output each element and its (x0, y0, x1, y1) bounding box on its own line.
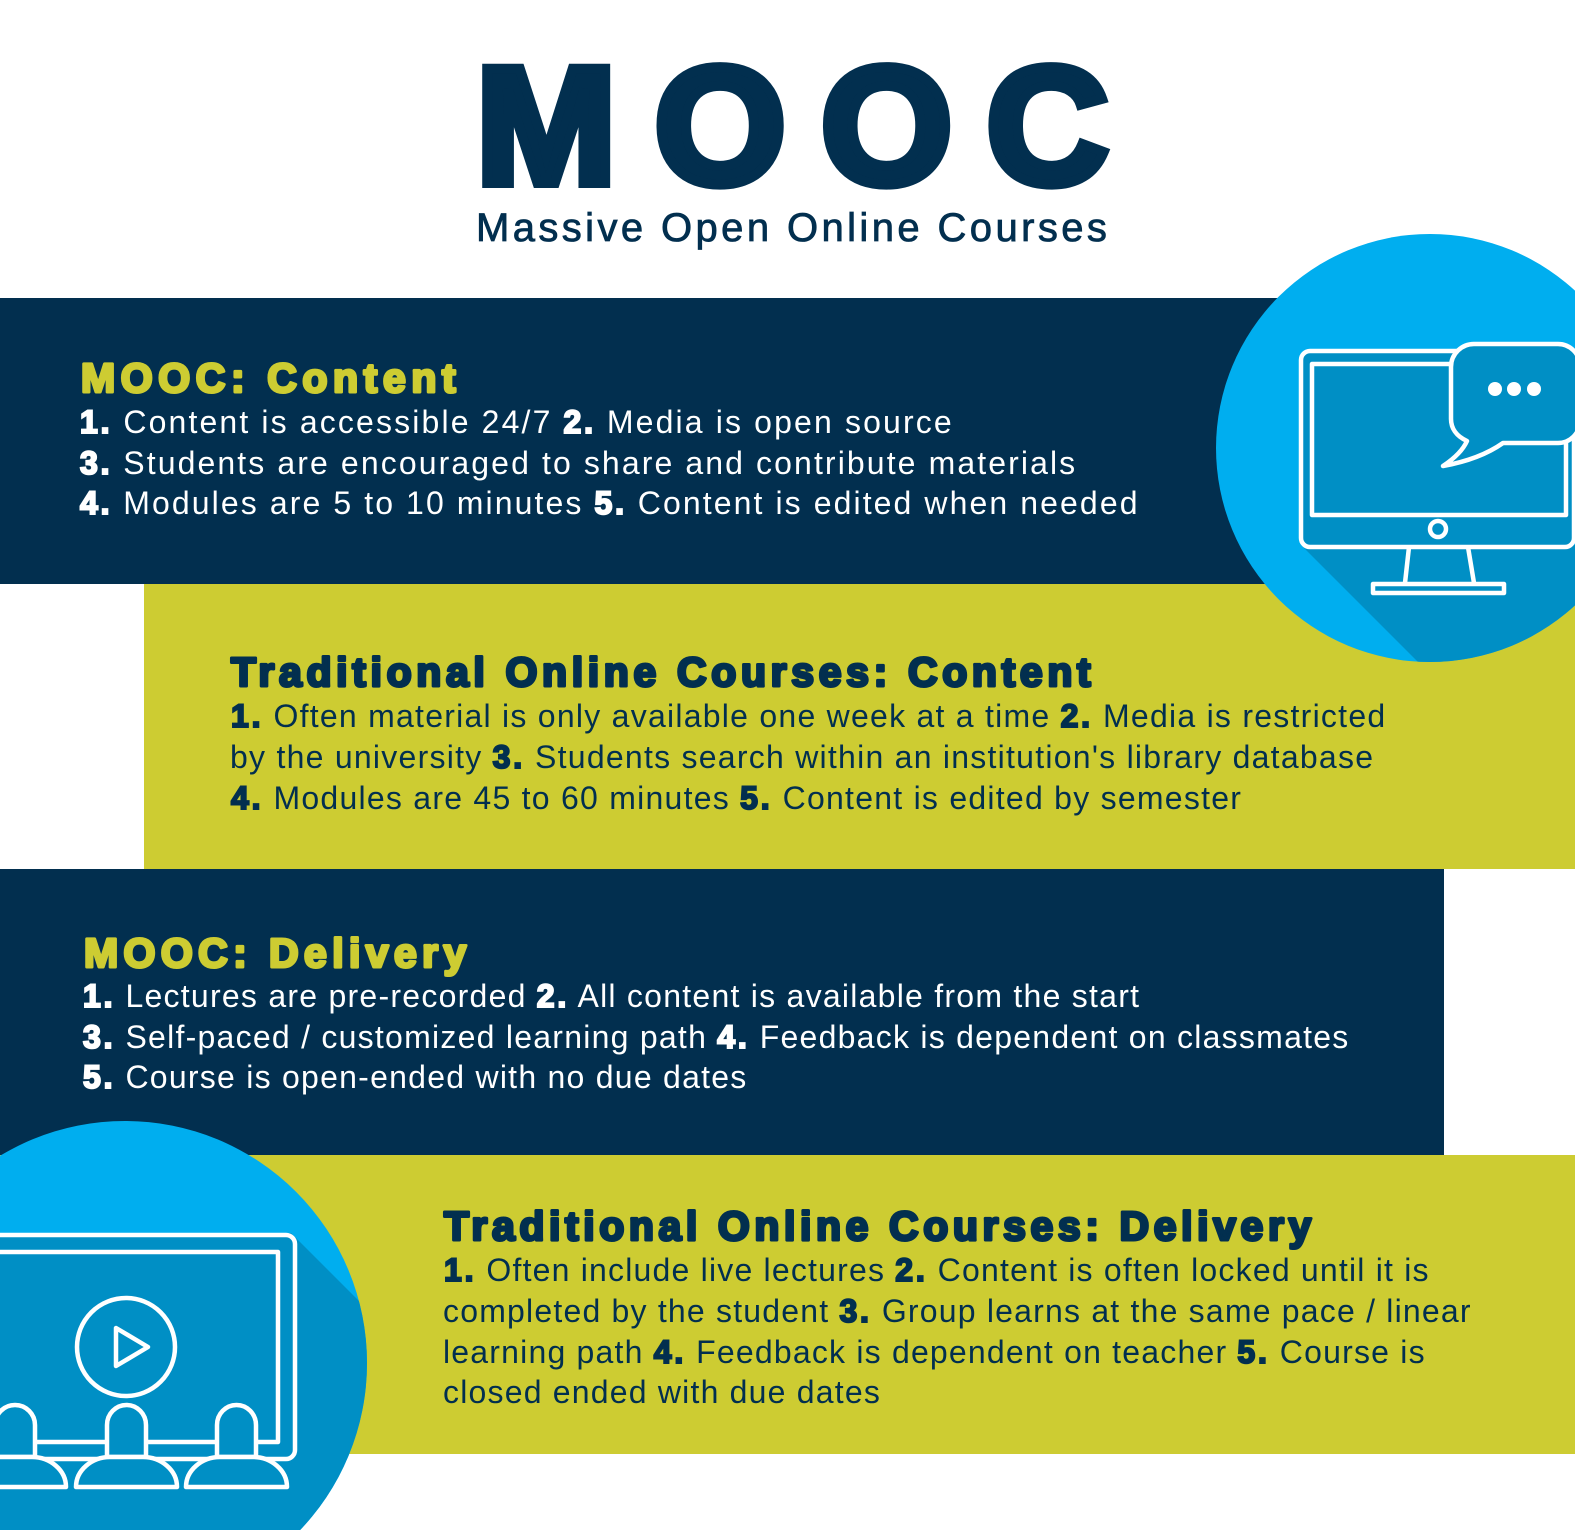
text block: MOOC content list: 1. Content is accessible 24/7 2. Media is open source (80, 404, 954, 440)
heading: MOOC content: MOOC: Content (81, 355, 461, 401)
heading: traditional delivery: Traditional Online Courses: Delivery (444, 1203, 1316, 1249)
text block: traditional delivery list: closed ended with due dates (443, 1374, 881, 1410)
text block: MOOC content list: 4. Modules are 5 to 10 minutes 5. Content is edited when needed (80, 485, 1140, 521)
title: MOOC (476, 34, 1108, 219)
text block: MOOC delivery list: 5. Course is open-ended with no due dates (83, 1059, 748, 1095)
text block: traditional delivery list (443, 1252, 1472, 1410)
text block: traditional delivery list: 1. Often include live lectures 2. Content is often locked until it is (444, 1252, 1430, 1288)
text block: traditional content list: 4. Modules are 45 to 60 minutes 5. Content is edited by semester (231, 780, 1242, 816)
heading: MOOC delivery: MOOC: Delivery (84, 930, 472, 976)
text block: traditional content list (230, 698, 1386, 816)
text block: MOOC delivery list (83, 978, 1350, 1095)
text block: MOOC delivery list: 3. Self-paced / customized learning path 4. Feedback is dependent on classmates (83, 1019, 1350, 1055)
text block: traditional delivery list: learning path 4. Feedback is dependent on teacher 5. Course is (443, 1334, 1426, 1370)
text block: traditional content list: by the university 3. Students search within an institution's library database (230, 739, 1374, 775)
icon: monitor with speech bubble (1216, 234, 1575, 665)
icon: video lecture screen with audience (0, 1121, 367, 1530)
subtitle: Massive Open Online Courses (476, 206, 1110, 250)
panel: traditional delivery (0, 1155, 1575, 1454)
text block: traditional content list: 1. Often material is only available one week at a time 2. Media is restricted (231, 698, 1386, 734)
panel: MOOC content (0, 298, 1320, 584)
text block: MOOC delivery list: 1. Lectures are pre-recorded 2. All content is available from the start (83, 978, 1140, 1014)
panel: MOOC delivery (0, 869, 1444, 1155)
panel: traditional content (144, 584, 1575, 869)
text block: MOOC content list (80, 404, 1140, 521)
text block: traditional delivery list: completed by the student 3. Group learns at the same pace / linear (443, 1293, 1472, 1329)
heading: traditional content: Traditional Online Courses: Content (231, 649, 1095, 695)
text block: MOOC content list: 3. Students are encouraged to share and contribute materials (80, 445, 1077, 481)
